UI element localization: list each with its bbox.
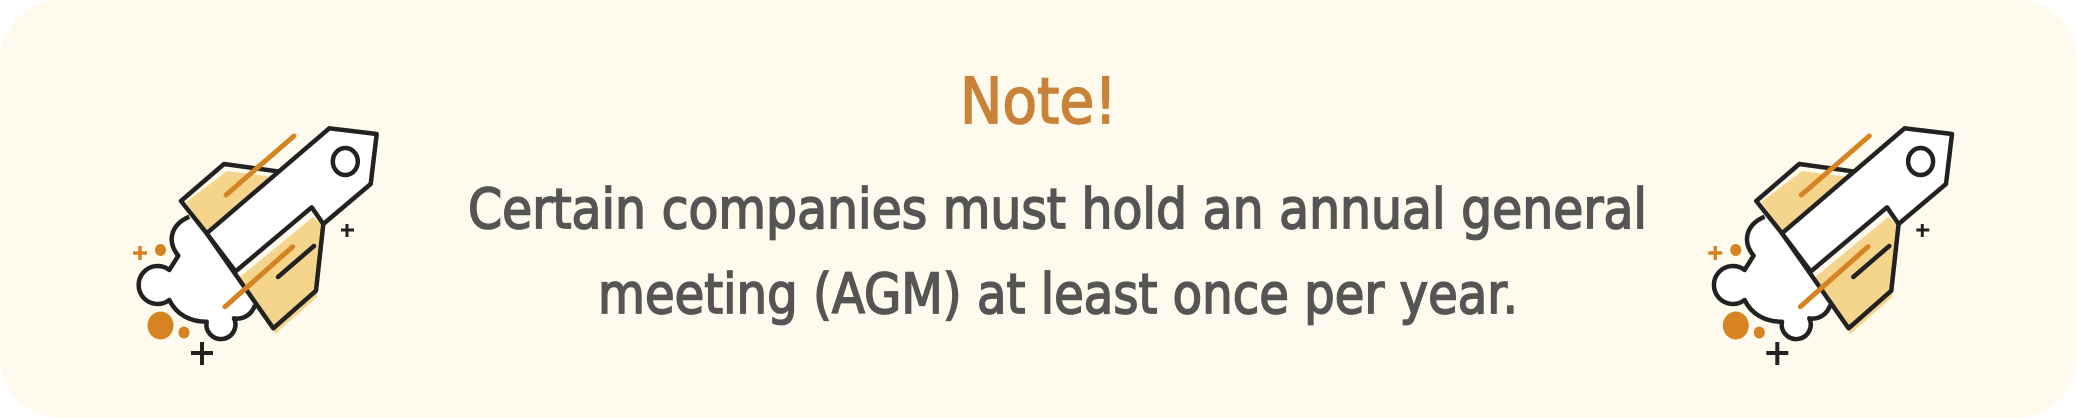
text block: AGM note: Certain companies must hold an annual general bbox=[468, 177, 1647, 241]
icon: rocket left bbox=[133, 128, 377, 365]
icon: rocket right bbox=[1708, 128, 1952, 365]
text block: AGM note bbox=[468, 177, 1647, 326]
text block: AGM note: meeting (AGM) at least once per year. bbox=[598, 262, 1518, 326]
heading: Note!: Note! bbox=[960, 65, 1117, 138]
